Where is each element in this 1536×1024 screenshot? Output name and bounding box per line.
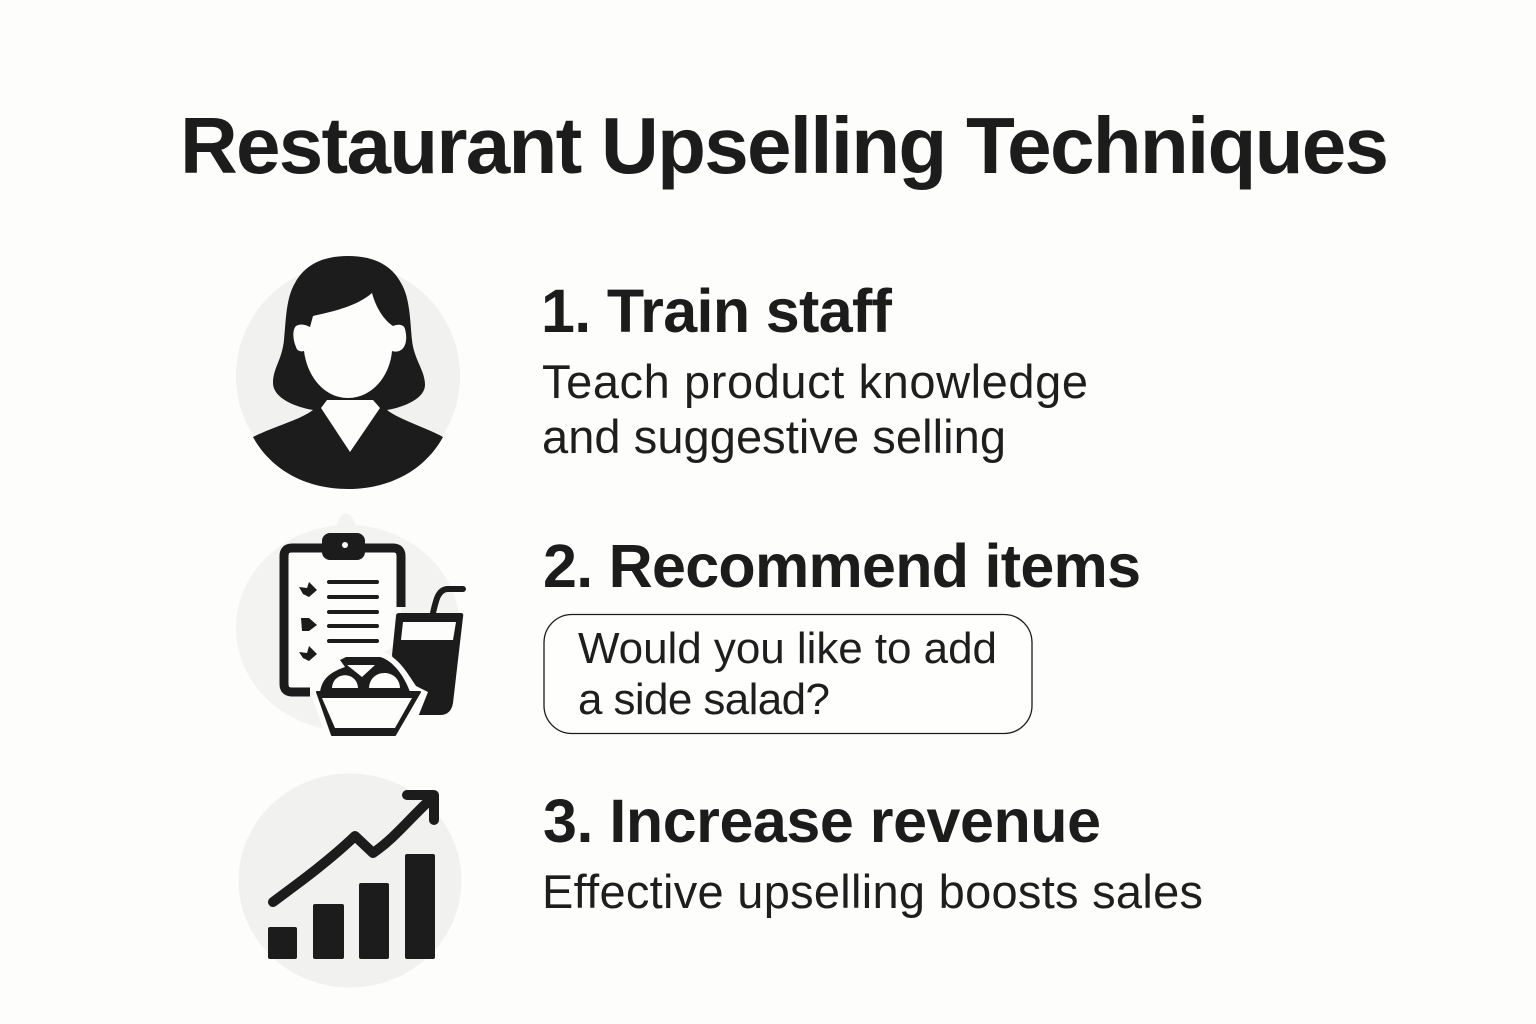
heading: recommend items: 2. Recommend items [543, 532, 1141, 600]
callout: suggestion speech box: Would you like to add [578, 624, 997, 673]
text: train staff description: Teach product knowledge [542, 355, 1088, 408]
panel: step 3 increase revenue [238, 774, 1203, 988]
panel: step 2 recommend items [236, 513, 1141, 742]
text: increase revenue description: Effective upselling boosts sales [542, 865, 1203, 918]
icon: staff member [236, 256, 460, 489]
callout: suggestion speech box [544, 614, 1032, 734]
title: Restaurant Upselling Techniques [180, 101, 1389, 190]
callout: suggestion speech box: a side salad? [578, 675, 830, 724]
heading: train staff: 1. Train staff [541, 277, 893, 345]
icon: clipboard, drink and bowl [236, 513, 463, 742]
text: train staff description: and suggestive selling [542, 410, 1006, 463]
icon: growth chart [238, 774, 462, 988]
heading: increase revenue: 3. Increase revenue [543, 787, 1101, 855]
panel: step 1 train staff [236, 256, 1088, 489]
text: train staff description [542, 355, 1088, 463]
